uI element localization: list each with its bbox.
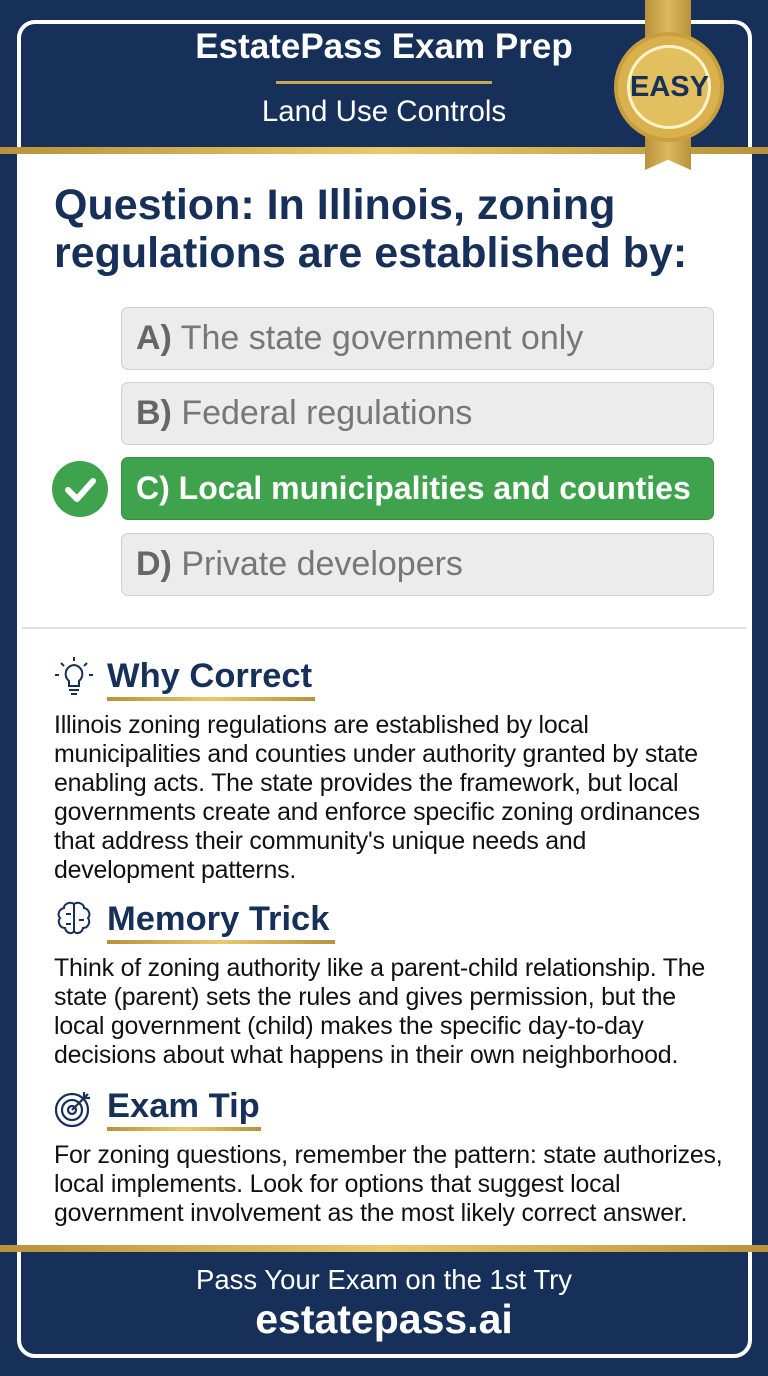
- option B: B) Federal regulations: [136, 394, 472, 432]
- icon: brain: [58, 902, 90, 934]
- option A: [121, 307, 714, 370]
- option C correct: [121, 457, 714, 520]
- question: regulations are established by:: [54, 229, 687, 277]
- text: why correct: development patterns.: [54, 856, 296, 884]
- text: memory trick: local government (child) makes the specific day-to-day: [54, 1012, 644, 1040]
- icon: target: [54, 1092, 90, 1128]
- badge: EASY: [614, 0, 724, 170]
- text: exam tip: government involvement as the most likely correct answer.: [54, 1199, 687, 1227]
- text: why correct: governments create and enforce specific zoning ordinances: [54, 798, 700, 826]
- heading: Exam Tip: Exam Tip: [107, 1087, 260, 1125]
- badge: EASY: EASY: [630, 71, 709, 103]
- text: memory trick: Think of zoning authority like a parent-child relationship. The: [54, 954, 705, 982]
- text: exam tip: local implements. Look for options that suggest local: [54, 1170, 620, 1198]
- text: exam tip: For zoning questions, remember the pattern: state authorizes,: [54, 1141, 723, 1169]
- content panel: [20, 152, 748, 1246]
- option A: A) The state government only: [136, 319, 583, 357]
- text: memory trick: [54, 954, 705, 1069]
- icon: bulb: [55, 657, 93, 695]
- text: memory trick: decisions about what happens in their own neighborhood.: [54, 1041, 678, 1069]
- text: why correct: [54, 711, 700, 884]
- text: exam tip: [54, 1141, 723, 1227]
- text: why correct: municipalities and counties under authority granted by state: [54, 740, 698, 768]
- text: why correct: that address their community's unique needs and: [54, 827, 586, 855]
- option D: D) Private developers: [136, 545, 463, 583]
- question: Question: In Illinois, zoning: [54, 181, 615, 229]
- icon: check: [52, 461, 108, 517]
- header background: [0, 0, 768, 148]
- footer url: estatepass.ai: [255, 1296, 513, 1342]
- option B: [121, 382, 714, 445]
- title: EstatePass Exam Prep: [195, 27, 573, 66]
- text: why correct: Illinois zoning regulations are established by local: [54, 711, 589, 739]
- option C correct: C) Local municipalities and counties: [136, 470, 691, 506]
- option D: [121, 533, 714, 596]
- heading: Why Correct: Why Correct: [107, 657, 312, 695]
- question: [54, 181, 687, 277]
- footer tagline: Pass Your Exam on the 1st Try: [196, 1264, 572, 1295]
- heading: Memory Trick: Memory Trick: [107, 900, 329, 938]
- text: why correct: enabling acts. The state provides the framework, but local: [54, 769, 678, 797]
- text: memory trick: state (parent) sets the rules and gives permission, but the: [54, 983, 676, 1011]
- subtitle: Land Use Controls: [262, 95, 506, 128]
